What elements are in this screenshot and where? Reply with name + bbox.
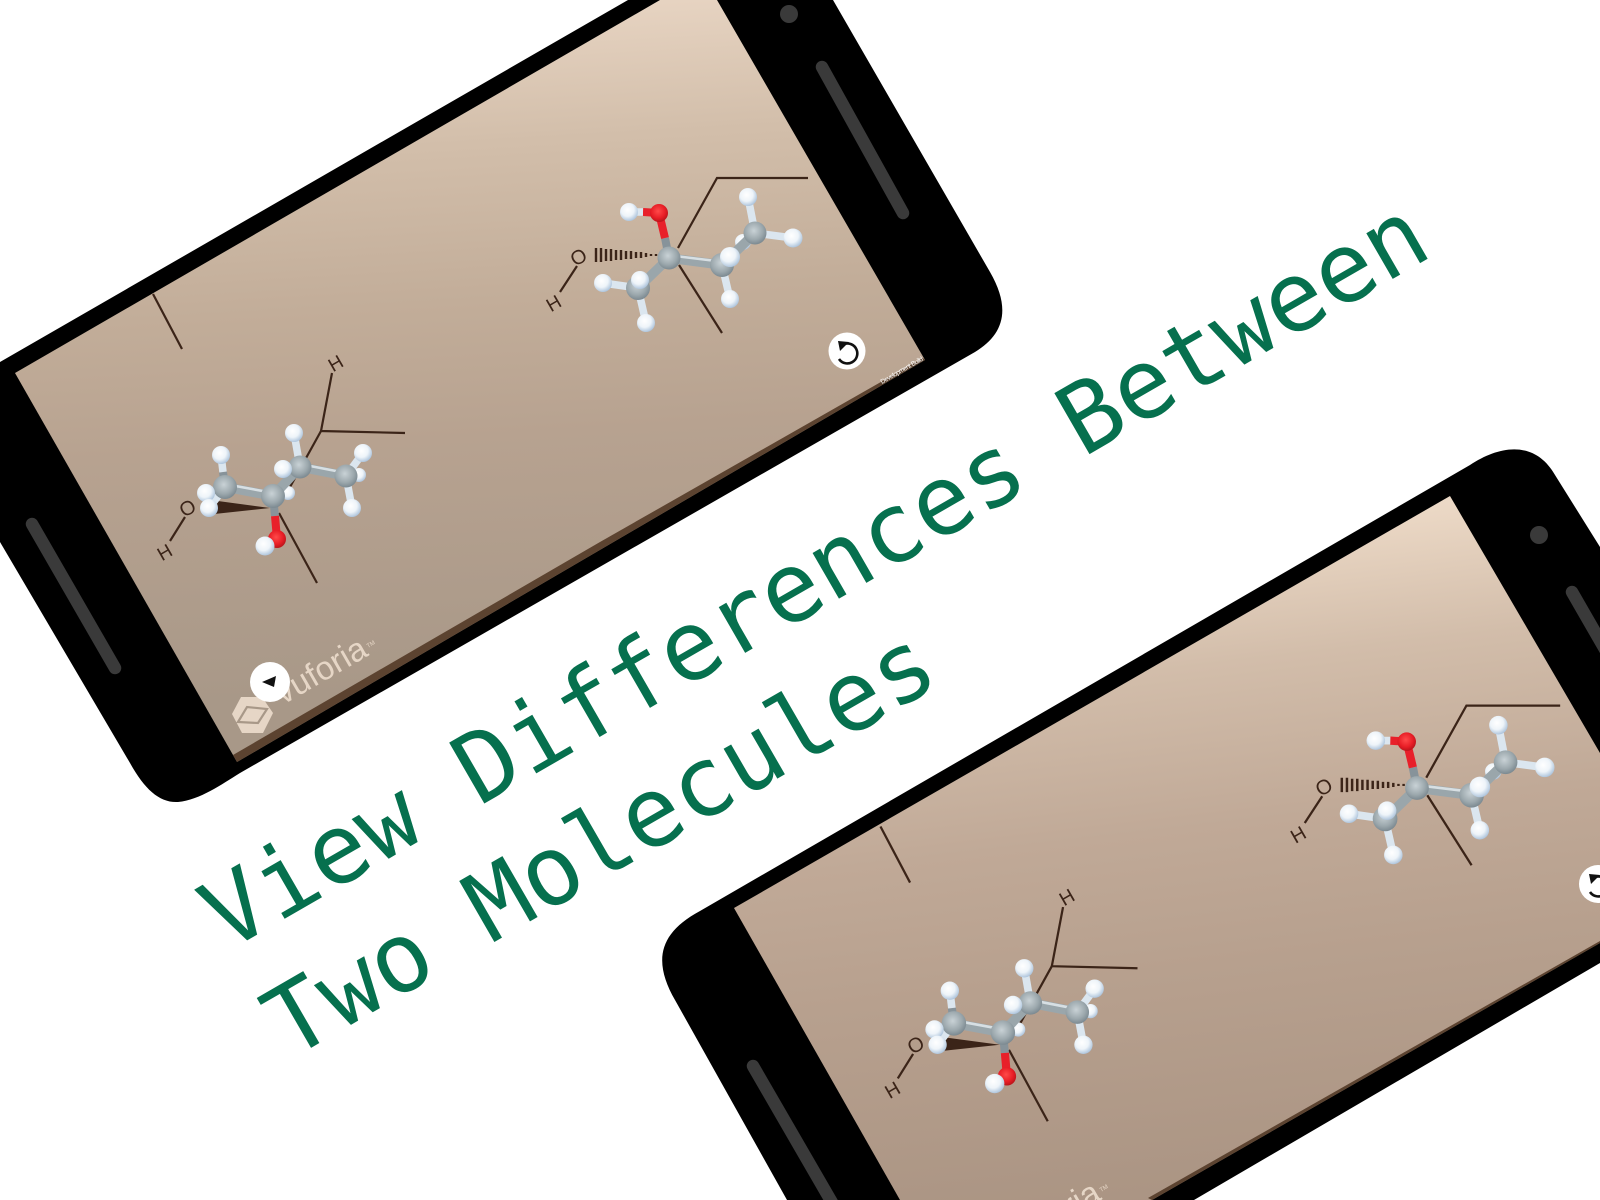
sketch: left molecule drawing: O [904, 1032, 929, 1059]
speaker: right [1572, 592, 1600, 658]
speaker: left [753, 1066, 834, 1200]
speaker: right [822, 67, 903, 213]
ball and stick model: left molecule [925, 959, 1104, 1093]
sketch: right molecule drawing: H [543, 292, 565, 317]
phone: top left device [0, 0, 1002, 802]
phone: bottom right device [662, 449, 1600, 1200]
button: reset, cropped by the page edge [1579, 865, 1600, 903]
ball and stick model: right molecule [1340, 716, 1555, 864]
vuforia logo, cropped by the page edge [1001, 1173, 1110, 1200]
sketch: left molecule drawing: H [325, 352, 347, 377]
vuforia logo: vuforia [268, 629, 374, 711]
title line 2: Two Molecules [245, 605, 954, 1080]
sketch: left molecule drawing [153, 294, 405, 583]
sketch: left molecule drawing: H [881, 1078, 904, 1104]
speaker: left [32, 524, 115, 668]
camera dot [1530, 526, 1548, 544]
label: development build: Development Build [880, 355, 925, 386]
phone body [0, 0, 1002, 802]
sketch: right molecule drawing: O [1311, 774, 1337, 801]
phone body [662, 449, 1600, 1200]
ball and stick model: right molecule [594, 188, 802, 332]
title [182, 177, 1447, 1080]
sketch: right molecule drawing: O [567, 244, 591, 271]
sketch: left molecule drawing: O [176, 495, 200, 522]
button: navigation arrow [250, 662, 290, 702]
vuforia logo, cropped by the page edge: TM [1099, 1184, 1110, 1194]
screen photo background [734, 496, 1600, 1200]
sketch: right molecule drawing [1287, 706, 1560, 865]
button: reset [828, 332, 866, 370]
screen photo background [15, 0, 925, 762]
camera dot [780, 5, 798, 23]
title line 1: View Differences Between [182, 177, 1447, 972]
sketch: left molecule drawing: H [154, 541, 176, 566]
sketch: right molecule drawing [543, 178, 808, 333]
vuforia logo [232, 629, 377, 733]
ball and stick model: left molecule [197, 424, 372, 556]
table edge shadow [1148, 941, 1600, 1200]
sketch: left molecule drawing [880, 826, 1138, 1121]
sketch: right molecule drawing: H [1287, 822, 1310, 848]
table edge shadow [233, 358, 925, 762]
vuforia logo: TM [366, 640, 377, 650]
sketch: left molecule drawing: H [1056, 885, 1079, 911]
